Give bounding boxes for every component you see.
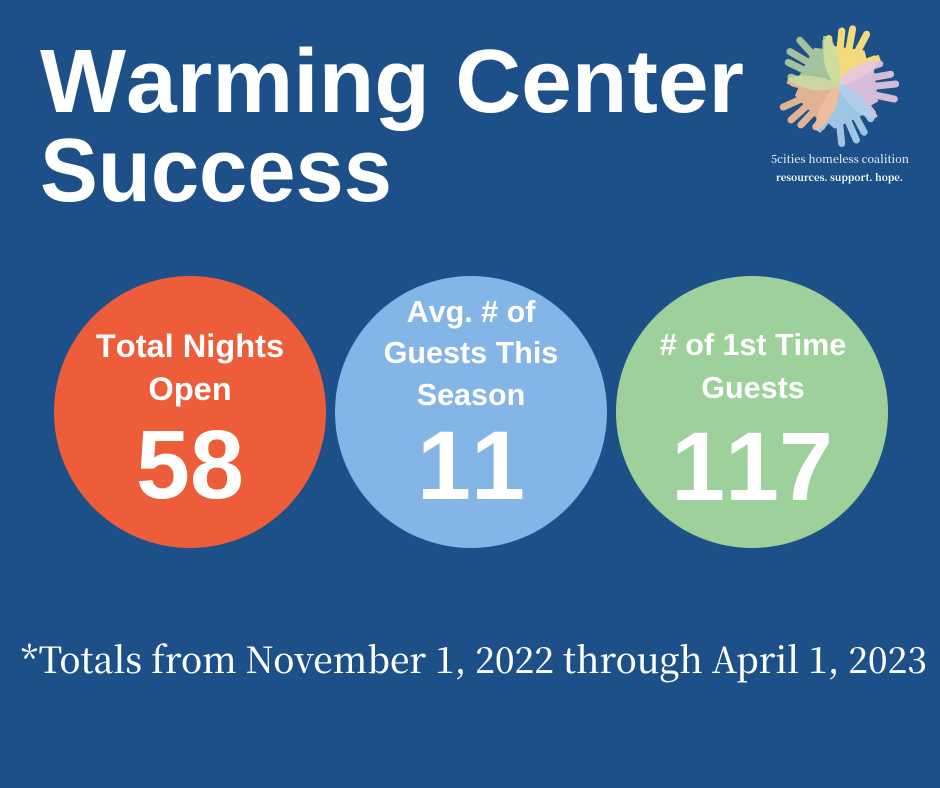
title: [40, 32, 744, 221]
logo tagline: resources. support. hope.: [776, 169, 903, 184]
number: 117: [671, 412, 833, 521]
number: 58: [136, 410, 244, 519]
label line 2: Guests: [701, 371, 805, 405]
label: Avg. # of: [407, 295, 536, 329]
icon: five overlapping hands: [769, 25, 903, 156]
label line 2: Guests This: [384, 336, 558, 370]
stat circle: first time guests: [616, 276, 888, 548]
label: # of 1st Time: [660, 328, 846, 362]
number: 11: [417, 411, 525, 520]
label: Total Nights: [96, 327, 284, 364]
title: Success: [40, 121, 392, 221]
label line 2: Open: [148, 370, 232, 407]
logo name: 5cities homeless coalition: [771, 151, 909, 167]
stat circle: average guests: [335, 276, 607, 548]
stat circle: total nights open: [54, 276, 326, 548]
footnote: *Totals from November 1, 2022 through April 1, 2023: [21, 633, 927, 684]
label line 3: Season: [417, 378, 525, 412]
title: Warming Center: [40, 32, 744, 132]
logo: 5cities homeless coalition: [769, 25, 909, 184]
